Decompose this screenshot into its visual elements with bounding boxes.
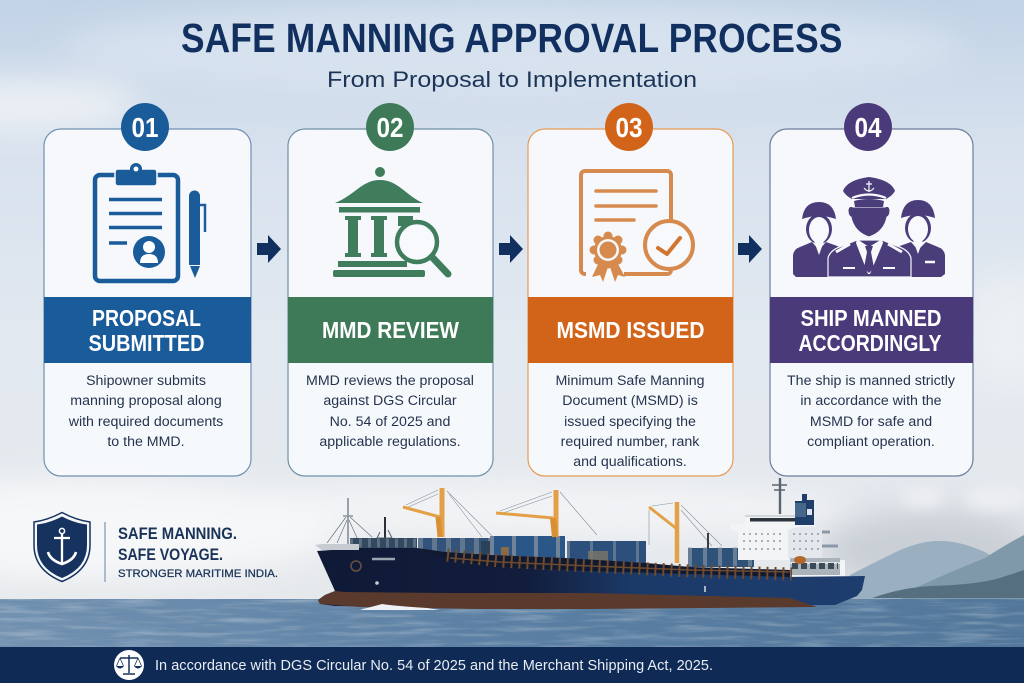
band heading: [528, 297, 733, 363]
ship cranes: [403, 488, 677, 563]
card: [528, 129, 733, 476]
description: Shipowner submits: [86, 373, 206, 389]
band heading: [288, 297, 493, 363]
ship deck: [417, 548, 790, 578]
card: [288, 129, 493, 476]
bow wave: [360, 604, 440, 610]
description: and qualifications.: [573, 454, 687, 470]
divider: [104, 522, 106, 582]
footer bar: [0, 647, 1024, 683]
panel: step 4 ship manned accordingly: [770, 103, 973, 476]
ship forecastle: [315, 544, 359, 550]
band heading: ACCORDINGLY: [798, 330, 942, 356]
arrow: step 1 to 2: [257, 235, 281, 263]
slogan: SAFE MANNING.: [118, 525, 237, 543]
footer note: In accordance with DGS Circular No. 54 of 2025 and the Merchant Shipping Act, 2025.: [155, 658, 713, 674]
officer: [828, 177, 911, 277]
slogan: STRONGER MARITIME INDIA.: [118, 568, 278, 580]
icon: ship's officer and crew: [793, 177, 945, 277]
number badge: 03: [616, 112, 642, 143]
left crew member: [793, 202, 840, 277]
ship masts and rigging: [327, 478, 787, 548]
description: issued specifying the: [564, 414, 696, 430]
right crew member: [897, 200, 945, 277]
band heading: [44, 297, 251, 363]
ship hull: [317, 548, 865, 608]
icon: scales of justice: [114, 650, 144, 680]
background: mountains: [850, 535, 1024, 600]
number badge: 04: [854, 112, 882, 143]
number badge: [121, 103, 169, 151]
slogan: [118, 525, 278, 580]
number badge: [605, 103, 653, 151]
icon: clipboard and pen: [95, 163, 205, 281]
description: against DGS Circular: [323, 393, 457, 409]
band heading: SUBMITTED: [88, 330, 204, 356]
description: in accordance with the: [800, 393, 942, 409]
description: applicable regulations.: [319, 434, 461, 450]
description: No. 54 of 2025 and: [330, 414, 450, 430]
panel: step 3 MSMD issued: [528, 103, 733, 476]
band heading: MSMD ISSUED: [556, 317, 704, 343]
ship containers: [350, 536, 754, 567]
number badge: 02: [376, 112, 404, 143]
description: to the MMD.: [107, 434, 185, 450]
ship hull markings: [351, 559, 705, 592]
number badge: [366, 103, 414, 151]
logo: anchor shield: [34, 512, 90, 582]
description: MMD reviews the proposal: [306, 373, 474, 389]
number badge: 01: [132, 112, 158, 143]
panel: step 2 MMD review: [288, 103, 493, 476]
description: manning proposal along: [70, 393, 222, 409]
icon: certificate with seal and check: [581, 171, 693, 282]
card: [44, 129, 251, 476]
ship lashing bridges: [447, 555, 792, 574]
ship superstructure: [730, 494, 845, 576]
description: The ship is manned strictly: [787, 373, 956, 389]
description: MSMD for safe and: [810, 414, 932, 430]
number badge: [844, 103, 892, 151]
arrow: step 3 to 4: [738, 235, 762, 263]
cargo ship: [315, 478, 865, 610]
arrow: step 2 to 3: [499, 235, 523, 263]
band heading: [770, 297, 973, 363]
description: required number, rank: [561, 434, 700, 450]
description: Minimum Safe Manning: [555, 373, 705, 389]
description: Document (MSMD) is: [562, 393, 698, 409]
description: compliant operation.: [807, 434, 935, 450]
band heading: PROPOSAL: [92, 305, 201, 331]
band heading: SHIP MANNED: [800, 305, 942, 331]
panel: step 1 proposal submitted: [44, 103, 251, 476]
background: sea: [0, 599, 1024, 648]
ship boot topping: [318, 591, 817, 609]
icon: institution with magnifier: [333, 167, 448, 277]
title: SAFE MANNING APPROVAL PROCESS: [181, 16, 842, 62]
card: [770, 129, 973, 476]
slogan: SAFE VOYAGE.: [118, 546, 223, 564]
subtitle: From Proposal to Implementation: [327, 67, 697, 92]
description: with required documents: [68, 414, 223, 430]
band heading: MMD REVIEW: [322, 317, 459, 343]
